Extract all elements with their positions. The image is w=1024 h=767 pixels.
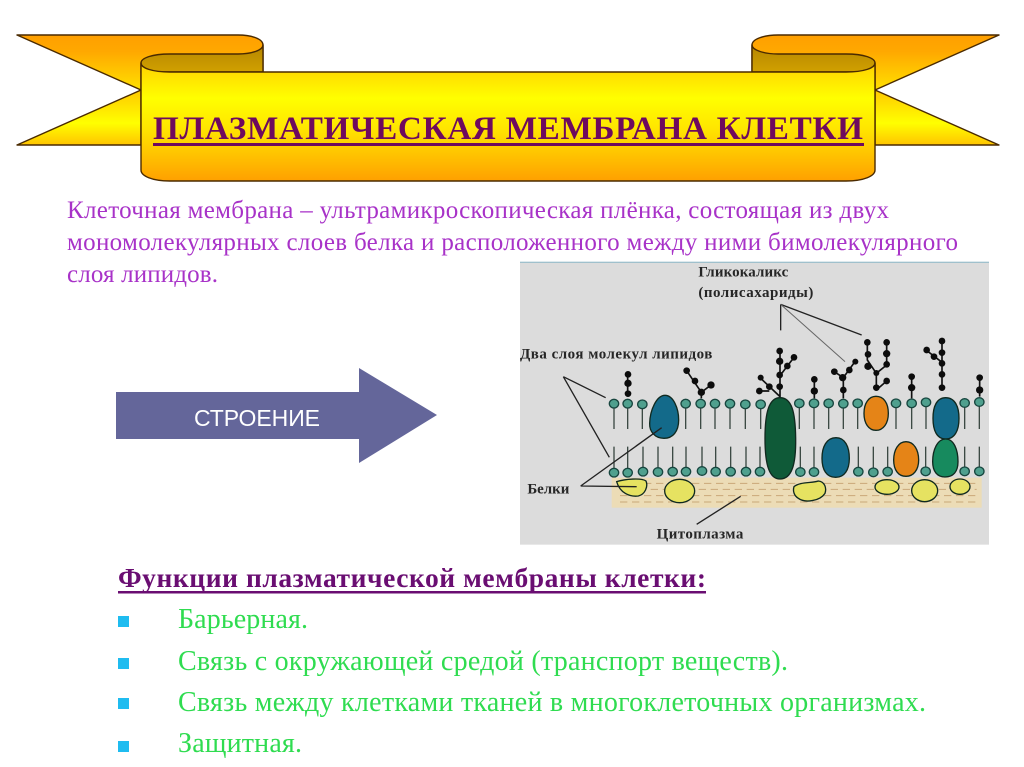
glycocalyx sugar chains [624, 338, 983, 398]
definition paragraph [67, 197, 958, 288]
lipid bilayer [609, 398, 984, 477]
membrane proteins [617, 395, 970, 503]
ribbon main panel [141, 63, 875, 181]
definition paragraph: Клеточная мембрана – ультрамикроскопическая плёнка, состоящая из двух [67, 197, 890, 224]
list items: Связь с окружающей средой (транспорт веществ). [178, 646, 788, 677]
list items [178, 604, 926, 759]
definition paragraph: слоя липидов. [67, 261, 218, 288]
functions list [118, 604, 926, 759]
ribbon left tail [17, 35, 263, 145]
diagram labels [520, 264, 813, 542]
definition paragraph: мономолекулярных слоев белка и расположенного между ними бимолекулярного [67, 229, 958, 256]
ribbon right tail [752, 35, 999, 145]
membrane diagram [520, 262, 989, 545]
diagram labels: Цитоплазма [657, 526, 744, 542]
diagram labels: Белки [527, 482, 570, 498]
banner ribbon [17, 35, 999, 181]
title: ПЛАЗМАТИЧЕСКАЯ МЕМБРАНА КЛЕТКИ [153, 110, 863, 147]
arrow: structure: СТРОЕНИЕ [194, 405, 320, 431]
bullet markers [118, 616, 129, 752]
diagram leader lines [563, 304, 862, 524]
arrow: structure [116, 368, 437, 463]
diagram labels: Два слоя молекул липидов [520, 346, 712, 362]
diagram labels: (полисахариды) [698, 285, 813, 301]
list items: Связь между клетками тканей в многоклеточных организмах. [178, 687, 926, 718]
cytoplasm band [612, 478, 982, 508]
functions heading: Функции плазматической мембраны клетки: [118, 562, 706, 593]
list items: Барьерная. [178, 604, 308, 635]
diagram labels: Гликокаликс [698, 264, 789, 280]
list items: Защитная. [178, 728, 302, 759]
